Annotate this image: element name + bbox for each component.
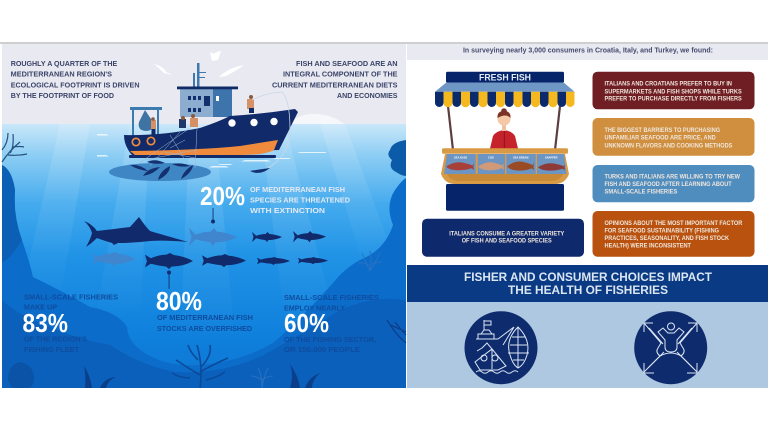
fish row two light [93,252,135,266]
callout: barriers: THE BIGGEST BARRIERS TO PURCHASING [604,127,720,134]
pointer to overfished fish [167,270,171,289]
coral bottom left blob [8,362,34,388]
awning [435,83,574,107]
callout: variety: ITALIANS CONSUME A GREATER VARIETY [449,230,565,237]
side and sea-floor rock layer [2,165,406,388]
text: top left statement [11,59,140,100]
text: top right statement: FISH AND SEAFOOD ARE AN [296,59,398,68]
stat: 60 percent [284,295,379,354]
tray labels: SEA BREAM [513,156,528,160]
text: top left statement: ECOLOGICAL FOOTPRINT IS DRIVEN [11,80,140,90]
stat: 80 percent: 80% [156,288,202,316]
text: top right statement: CURRENT MEDITERRANEAN DIETS [272,80,398,90]
fishing rod and line [252,92,290,168]
tray labels: SEA BASS [454,156,467,160]
left rock [2,165,22,262]
tray fish [446,162,474,170]
stat: 83 percent: 83% [22,310,68,338]
callout: where to buy [592,72,754,109]
stat: 20 percent [200,183,350,215]
birds [154,51,244,77]
stall base [446,184,564,211]
stat: 60 percent: 60% [284,310,329,338]
sign: fresh fish: FRESH FISH [479,73,531,83]
callout: sustainability: FOR SEAFOOD SUSTAINABILITY (FISHING [604,228,719,235]
life rings [132,137,155,146]
fish trays [444,154,566,174]
survey header band: In surveying nearly 3,000 consumers in Croatia, Italy, and Turkey, we found: [463,48,713,54]
coral right [358,251,382,271]
callout: where to buy: ITALIANS AND CROATIANS PREFER TO BUY IN [604,81,732,88]
fish market stall [435,72,574,211]
callout: variety [422,219,584,257]
stat: 83 percent: SMALL-SCALE FISHERIES [24,294,118,302]
tuna highlighted [189,228,237,246]
icon: boat and net [464,311,538,384]
text: top left statement: BY THE FOOTPRINT OF FOOD [11,91,114,100]
seaweed [84,364,320,388]
callout: sustainability: PRACTICES, SEASONALITY, AND FISH STOCK [604,235,729,242]
stat: 60 percent: OF THE FISHING SECTOR, [284,337,376,344]
heading band: fisher and consumer choices: THE HEALTH OF FISHERIES [508,283,668,297]
callout: where to buy: SUPERMARKETS AND FISH SHOPS WHILE TURKS [604,88,742,95]
display case [441,154,569,184]
callout: barriers [592,118,754,156]
stat: 20 percent: WITH EXTINCTION [250,208,325,215]
heading band: fisher and consumer choices [407,265,768,302]
stat: 83 percent: FISHING FLEET [24,347,80,354]
coral top right [388,140,406,176]
text: top right statement: INTEGRAL COMPONENT OF THE [283,70,398,79]
fish row two dark [145,253,193,269]
callout: willingness: SMALL-SCALE FISHERIES [604,188,677,195]
callout: willingness [592,165,754,202]
stat: 60 percent: EMPLOY NEARLY [284,306,345,312]
callout: where to buy: PREFER TO PURCHASE DIRECTLY FROM FISHERS [604,96,742,103]
vendor [490,108,518,148]
hull [124,109,298,155]
counter top [442,148,568,154]
mast [193,63,206,87]
pointer to tuna [211,208,215,224]
callout: sustainability [592,211,754,257]
gantry and hanging net [130,107,162,138]
coral faint bottom [251,368,273,388]
callout: willingness: FISH AND SEAFOOD AFTER LEARNING ABOUT [604,181,732,188]
keel [129,155,276,158]
crew [151,95,254,135]
stat: 20 percent: SPECIES ARE THREATENED [250,198,350,205]
stat: 20 percent: OF MEDITERRANEAN FISH [250,187,345,194]
orange stripe [130,140,278,155]
text: top right statement: AND ECONOMIES [337,91,398,100]
text: top left statement: ROUGHLY A QUARTER OF THE [11,59,118,68]
stat: 80 percent: STOCKS ARE OVERFISHED [157,326,252,333]
tray labels: SNAPPER [545,156,558,160]
coral top left [2,133,27,162]
stat: 20 percent: 20% [200,183,245,211]
stat: 80 percent: OF MEDITERRANEAN FISH [157,315,253,322]
survey header band [407,44,768,60]
tray labels [454,156,558,160]
fishing boat [109,63,298,181]
callout: variety: OF FISH AND SEAFOOD SPECIES [462,238,552,245]
net pile rock [109,163,211,181]
seaweed right edge [387,320,406,343]
net lines [138,128,197,168]
light rays [20,124,395,340]
stat: 60 percent: SMALL-SCALE FISHERIES [284,295,379,302]
callout: sustainability: OPINIONS ABOUT THE MOST IMPORTANT FACTOR [604,220,743,227]
poles [448,106,560,150]
cabin [180,89,214,117]
portholes [228,118,278,127]
heading band: fisher and consumer choices: FISHER AND CONSUMER CHOICES IMPACT [464,270,713,284]
tray labels: COD [488,156,494,160]
callout: willingness: TURKS AND ITALIANS ARE WILLING TO TRY NEW [604,173,740,180]
icon: person and arrows [634,311,707,384]
text: top left statement: MEDITERRANEAN REGION'S [11,70,112,79]
stat: 83 percent: MAKE UP [24,304,57,312]
stat: 83 percent: OF THE REGION'S [24,337,87,344]
sea water [2,124,406,388]
cloud behind the boat [285,114,356,130]
panel: impact icons [407,302,768,388]
caught fish [130,160,270,180]
fish row one [252,232,282,242]
water dashes [97,134,327,168]
callout: sustainability: HEALTH) WERE INCONSISTENT [604,243,691,250]
marlin [84,217,188,247]
callout: barriers: UNFAMILIAR SEAFOOD ARE PRICE, AND [604,135,716,142]
coral centre bottom [172,345,228,388]
fish chart: endangered species [84,217,328,269]
callout: barriers: UNKNOWN FLAVORS AND COOKING METHODS [604,142,732,149]
lower sea-floor layer [2,299,406,388]
stat: 83 percent [22,294,118,354]
panel: ocean scene [2,44,406,388]
stat: 80 percent [156,288,253,333]
text: top right statement [272,59,398,100]
stat: 60 percent: OR 150,000 PEOPLE [284,347,360,354]
